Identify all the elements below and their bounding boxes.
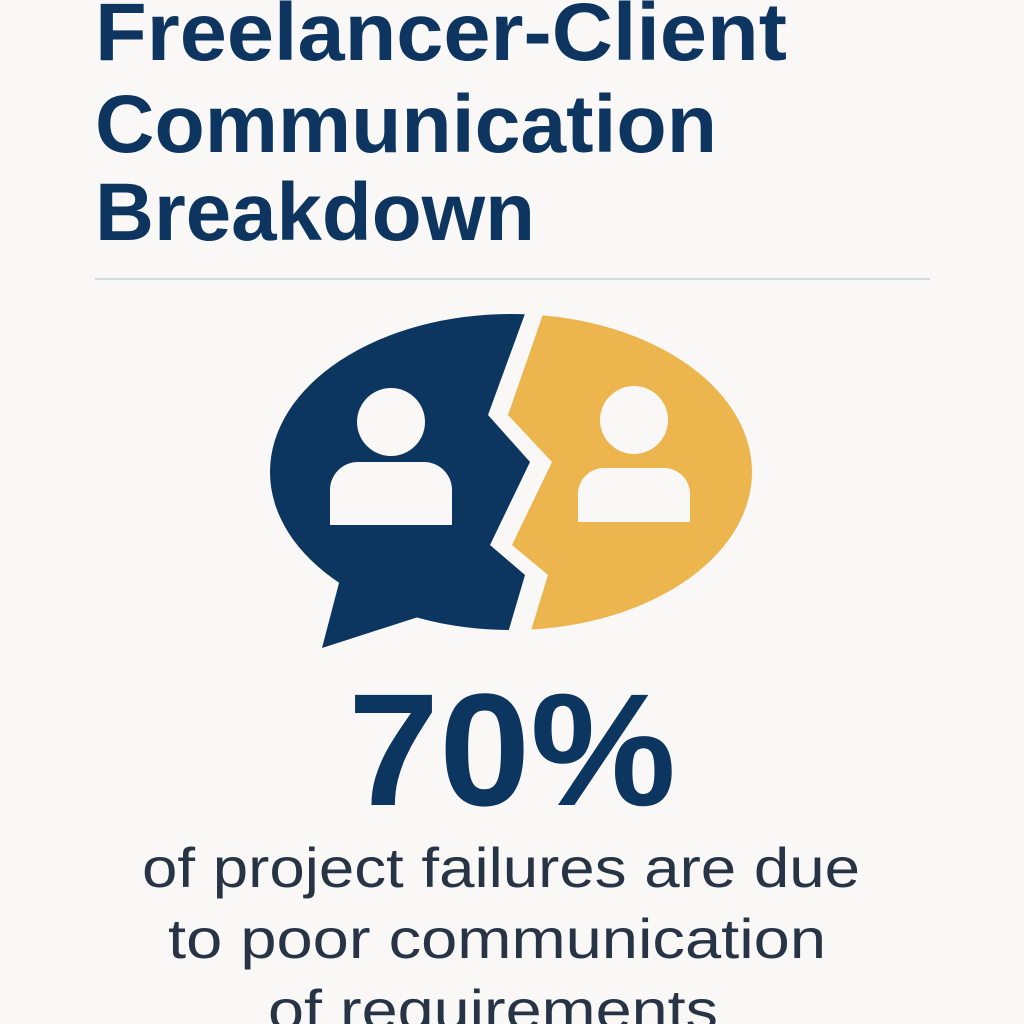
yellow half with client [508, 315, 752, 630]
navy half with freelancer [270, 314, 530, 648]
title: Breakdown [95, 167, 535, 258]
icon: split speech bubble [270, 314, 752, 648]
title: Communication [95, 79, 717, 170]
title [95, 0, 787, 258]
description text: of project failures are due [142, 836, 860, 899]
description text [142, 836, 860, 1024]
description text: to poor communication [168, 907, 826, 970]
statistic: 70% [348, 660, 676, 839]
